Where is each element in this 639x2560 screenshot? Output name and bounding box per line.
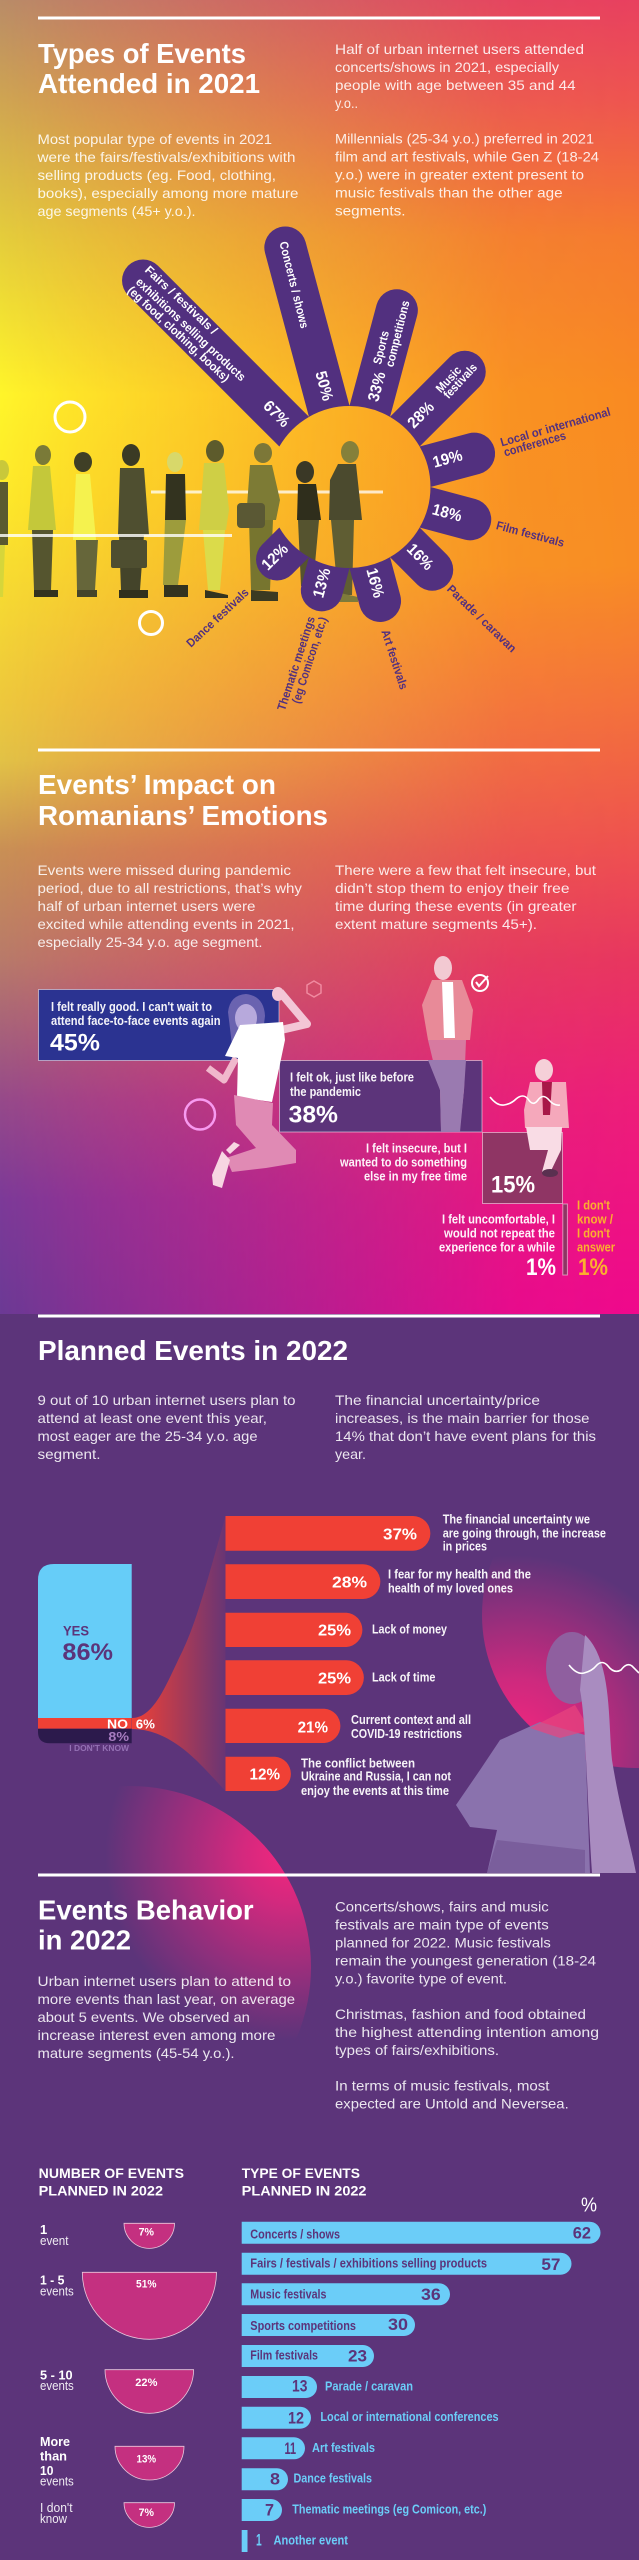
petal: concerts 50%: Concerts / shows	[277, 240, 312, 330]
bar: another: 1	[256, 2531, 262, 2550]
text block: most popular: selling products (eg. Food, clothing,	[38, 167, 276, 183]
decorative pink circle left	[0, 1786, 311, 2148]
callout: don't know 1%: know /	[577, 1211, 613, 1226]
petal: dance 12%	[184, 527, 309, 650]
bar: film: 23	[348, 2347, 367, 2366]
bar: concerts: 62	[573, 2223, 591, 2242]
row: I don't know: 7%	[139, 2507, 154, 2519]
row: 1-5 events: events	[40, 2284, 74, 2299]
text block: concerts and fairs: Concerts/shows, fairs and music	[335, 1899, 549, 1915]
bar 25% money: Lack of money	[372, 1621, 448, 1636]
callout: felt uncomfortable 1%: experience for a while	[439, 1240, 555, 1255]
petal: music 28%	[390, 342, 494, 447]
bar: dance: Dance festivals	[294, 2471, 372, 2486]
petal: sports 33%: competitions	[383, 299, 413, 368]
row: 1 event: event	[40, 2233, 69, 2248]
person 7	[296, 461, 321, 586]
person 6 with bag	[237, 443, 280, 601]
petal: music 28%: 28%	[405, 399, 438, 432]
row: more than 10 events: events	[40, 2474, 74, 2489]
bar chart: type of events	[242, 2195, 600, 2552]
bar: dance	[242, 2468, 372, 2490]
text block: half of urban users: people with age between 35 and 44	[335, 77, 576, 93]
callout: felt really good 45%	[38, 990, 279, 1060]
bar: conferences	[242, 2407, 499, 2429]
text block: concerts and fairs: expected are Untold and Neversea.	[335, 2096, 569, 2112]
callout: felt insecure 15%: 15%	[491, 1172, 535, 1199]
bar: another: Another event	[274, 2532, 349, 2547]
petal: music 28%: festivals	[440, 360, 480, 401]
row: more than 10 events: More	[40, 2434, 70, 2449]
text block: concerts and fairs: y.o.) favorite type of event.	[335, 1971, 507, 1987]
bar 25% time: 25%	[318, 1670, 351, 1687]
bar 37%: are going through, the increase	[443, 1525, 606, 1540]
stacked bar: plan to attend: YES	[63, 1623, 89, 1639]
row: 1-5 events	[40, 2272, 216, 2339]
stacked bar: plan to attend: 6%	[136, 1716, 155, 1731]
bar: concerts: Concerts / shows	[250, 2226, 340, 2241]
petal: art 16%: 16%	[362, 566, 387, 600]
text block: concerts and fairs: remain the youngest generation (18-24	[335, 1953, 596, 1969]
bar: film	[242, 2345, 374, 2367]
text block: most popular: Most popular type of events in 2021	[38, 131, 272, 147]
bar 12%: 12%	[250, 1766, 280, 1783]
petal: dance 12%: 12%	[259, 541, 292, 574]
text block: most popular: books), especially among more mature	[38, 185, 299, 201]
text block: 9 out of 10: segment.	[38, 1446, 100, 1462]
bar: sports: Sports competitions	[250, 2318, 356, 2333]
bar: art: 11	[284, 2439, 296, 2458]
row: 1 event: 7%	[139, 2227, 154, 2239]
petal: conferences 19%: Local or international	[499, 405, 612, 449]
petal: fairs 67%: 67%	[259, 398, 293, 431]
bar: dance: 8	[270, 2469, 280, 2488]
title: Events' Impact	[38, 769, 328, 831]
row: 1-5 events: 1 - 5	[40, 2272, 64, 2287]
text block: financial uncertainty: increases, is the main barrier for those	[335, 1410, 590, 1426]
text block: events were missed: excited while attending events in 2021,	[38, 916, 294, 932]
stacked bar: plan to attend: 86%	[62, 1639, 113, 1666]
callout: felt really good 45%: I felt really good. I can't wait to	[51, 999, 212, 1014]
bar: parade: 13	[292, 2377, 307, 2396]
person 8	[329, 441, 362, 602]
text block: events were missed: especially 25-34 y.o. age segment.	[38, 934, 262, 950]
petal: fairs 67%	[113, 251, 309, 447]
bar: parade: Parade / caravan	[325, 2379, 413, 2394]
text block: a few felt insecure: didn’t stop them to enjoy their free	[335, 880, 570, 896]
petal: film 18%: Film festivals	[495, 518, 566, 550]
bar 25% time	[226, 1660, 435, 1695]
text block: financial uncertainty: year.	[335, 1446, 366, 1462]
stacked bar: plan to attend: I DON'T KNOW	[69, 1744, 129, 1753]
person 4	[163, 452, 188, 597]
bar: music: 36	[421, 2285, 441, 2304]
text block: most popular: age segments (45+ y.o.).	[38, 203, 196, 219]
text block: financial uncertainty	[335, 1392, 596, 1462]
text block: 9 out of 10	[38, 1392, 296, 1462]
petal: fairs 67%: (eg food, clothing, books)	[125, 283, 232, 385]
decorative pink circle right	[482, 1462, 639, 1768]
section: Events' Impact on Romanians' Emotions	[38, 748, 615, 1281]
heading: number of events	[39, 2165, 184, 2198]
gradient background: upper sections	[0, 0, 639, 1314]
petal: art 16%: Art festivals	[378, 628, 411, 691]
photo: seated man	[524, 1059, 569, 1128]
row: I don't know: know	[40, 2511, 68, 2526]
petal: art 16%	[349, 557, 411, 691]
text block: urban internet users	[38, 1973, 295, 2061]
row: 5-10 events: 5 - 10	[40, 2367, 73, 2382]
bar: art	[242, 2437, 375, 2459]
percent sign: %	[581, 2195, 597, 2217]
title: Planned Events: Planned Events in 2022	[38, 1335, 348, 1366]
heading: type of events: PLANNED IN 2022	[242, 2182, 367, 2198]
callout: don't know 1%	[577, 1197, 615, 1281]
callout: felt ok 38%: 38%	[289, 1102, 338, 1129]
photo: standing man	[422, 956, 473, 1132]
text block: 9 out of 10: 9 out of 10 urban internet users plan to	[38, 1392, 296, 1408]
title: Events Behavior	[38, 1894, 254, 1955]
bar: sports	[242, 2314, 415, 2336]
petal: thematic 13%: (eg Comicon, etc.)	[289, 615, 330, 705]
row: 1 event: 1	[40, 2222, 47, 2237]
text block: half of urban users: film and art festivals, while Gen Z (18-24	[335, 148, 599, 164]
text block: concerts and fairs: festivals are main type of events	[335, 1917, 549, 1933]
text block: events were missed	[38, 862, 302, 950]
radial chart: event types attended	[113, 222, 612, 712]
person 0	[0, 460, 9, 597]
bar: art: Art festivals	[312, 2440, 375, 2455]
text block: half of urban users: music festivals than the other age	[335, 184, 563, 200]
bar 37%: The financial uncertainty we	[443, 1511, 590, 1526]
heading: number of events: NUMBER OF EVENTS	[39, 2165, 184, 2181]
text block: urban internet users: about 5 events. We observed an	[38, 2009, 250, 2025]
title: Events' Impact: Events’ Impact on	[38, 769, 276, 800]
bar 25% time: Lack of time	[372, 1670, 435, 1685]
text block: urban internet users: increase interest even among more	[38, 2027, 276, 2043]
bar: parade	[242, 2376, 413, 2398]
bar 21%: Current context and all	[351, 1712, 471, 1727]
bar 37%: 37%	[383, 1526, 417, 1543]
bar: conferences: 12	[288, 2408, 304, 2427]
bar: another	[242, 2530, 349, 2552]
text block: half of urban users: concerts/shows in 2021, especially	[335, 59, 559, 75]
text block: events were missed: Events were missed during pandemic	[38, 862, 291, 878]
photo: jumping woman	[208, 987, 307, 1188]
illustration: queue of people	[0, 440, 362, 602]
petal: fairs 67%: Fairs / festivals /	[142, 263, 221, 338]
bar: fairs: Fairs / festivals / exhibitions selling products	[250, 2255, 487, 2270]
text block: 9 out of 10: attend at least one event this year,	[38, 1410, 267, 1426]
text block: concerts and fairs: planned for 2022. Music festivals	[335, 1935, 551, 1951]
title: Events Behavior: Events Behavior	[38, 1894, 254, 1925]
callout: felt ok 38%: I felt ok, just like before	[290, 1070, 414, 1085]
bar 12%	[226, 1755, 452, 1798]
row: more than 10 events	[40, 2434, 184, 2489]
text block: a few felt insecure: extent mature segments 45+).	[335, 916, 537, 932]
title: Types of Events: Types of Events	[38, 38, 246, 69]
petal: sports 33%	[349, 285, 423, 417]
bar 28%: I fear for my health and the	[388, 1567, 531, 1582]
stacked bar: plan to attend	[38, 1564, 155, 1753]
person 2	[73, 452, 98, 597]
petal: concerts 50%	[260, 222, 350, 417]
text block: half of urban users	[335, 41, 599, 218]
text block: financial uncertainty: 14% that don’t have event plans for this	[335, 1428, 596, 1444]
icon: hexagon	[307, 981, 321, 997]
row: 1 event	[40, 2222, 174, 2248]
half-circle chart: number of events	[40, 2222, 216, 2527]
row: 5-10 events: 22%	[135, 2377, 158, 2389]
text block: most popular: were the fairs/festivals/exhibitions with	[36, 149, 295, 165]
petal: conferences 19%: 19%	[431, 447, 464, 472]
callout: felt ok 38%: the pandemic	[290, 1084, 361, 1099]
bar: fairs: 57	[541, 2255, 560, 2274]
section: Planned Events in 2022	[38, 1314, 639, 1873]
bar 21%	[226, 1709, 471, 1743]
petal: sports 33%: Sports	[370, 329, 392, 366]
bar: thematic: 7	[265, 2501, 274, 2520]
decorative white line behind people	[151, 490, 383, 494]
stacked bar: plan to attend: NO	[107, 1716, 128, 1731]
petal: conferences 19%: conferences	[502, 428, 568, 459]
text block: concerts and fairs: the highest attending intention among	[335, 2024, 599, 2040]
petal: music 28%: Music	[433, 363, 464, 395]
row: more than 10 events: 10	[40, 2463, 53, 2478]
bar: thematic: Thematic meetings (eg Comicon, etc.)	[292, 2501, 486, 2516]
row: I don't know	[40, 2500, 174, 2527]
wave decoration	[490, 1096, 560, 1105]
row: 5-10 events	[40, 2367, 194, 2413]
petal: parade 16%: 16%	[403, 541, 436, 574]
callout: felt really good 45%: 45%	[50, 1030, 100, 1057]
text block: events were missed: period, due to all restrictions, that’s why	[38, 880, 302, 896]
person 5	[199, 440, 229, 598]
text block: half of urban users: y.o..	[335, 95, 358, 111]
row: I don't know: I don't	[40, 2500, 73, 2515]
callout: felt really good 45%: attend face-to-face events again	[51, 1013, 221, 1028]
person 1	[28, 445, 58, 597]
row: more than 10 events: than	[40, 2449, 67, 2464]
callout: felt insecure 15%	[339, 1127, 562, 1204]
bar chart: barriers	[226, 1511, 606, 1798]
bar 25% money	[226, 1613, 448, 1647]
heading: type of events: TYPE OF EVENTS	[242, 2165, 360, 2181]
bar: music: Music festivals	[250, 2286, 326, 2301]
row: more than 10 events: 13%	[136, 2454, 156, 2466]
petal: conferences 19%	[420, 405, 612, 487]
callout: don't know 1%: I don't	[577, 1197, 611, 1212]
title: Events' Impact: Romanians’ Emotions	[38, 800, 328, 831]
decorative white line in front of people	[0, 534, 232, 537]
petal: concerts 50%: 50%	[311, 369, 336, 403]
callout: felt uncomfortable 1%	[439, 1204, 567, 1281]
text block: concerts and fairs: In terms of music festivals, most	[335, 2078, 550, 2094]
text block: concerts and fairs: types of fairs/exhibitions.	[335, 2042, 499, 2058]
bar 12%: The conflict between	[301, 1755, 415, 1770]
icon: pink ring	[185, 1100, 215, 1130]
bar 28%: health of my loved ones	[388, 1581, 513, 1596]
petal: parade 16%	[390, 527, 519, 655]
petal: parade 16%: Parade / caravan	[444, 582, 519, 655]
bar 37%	[226, 1511, 606, 1554]
bar 28%	[226, 1564, 531, 1599]
bar: conferences: Local or international conferences	[320, 2409, 499, 2424]
callout: felt uncomfortable 1%: I felt uncomfortable, I	[442, 1211, 555, 1226]
text block: half of urban users: Millennials (25-34 y.o.) preferred in 2021	[335, 130, 594, 146]
title: Types of Events: Attended in 2021	[38, 68, 260, 99]
row: 5-10 events: events	[40, 2378, 74, 2393]
callout: felt uncomfortable 1%: 1%	[526, 1254, 556, 1281]
petal: fairs 67%: exhibitions selling products	[133, 275, 249, 384]
text block: half of urban users: segments.	[335, 202, 406, 218]
title: Types of Events	[38, 38, 260, 99]
text block: urban internet users: mature segments (45-54 y.o.).	[38, 2045, 234, 2061]
bar: sports: 30	[388, 2315, 408, 2334]
callout: felt insecure 15%: else in my free time	[364, 1169, 467, 1184]
callout: felt ok 38%	[280, 1060, 482, 1132]
petal: film 18%	[420, 487, 566, 550]
bar: concerts	[242, 2222, 600, 2244]
petal: film 18%: 18%	[430, 501, 464, 526]
heading: type of events	[242, 2165, 367, 2198]
petal: dance 12%: Dance festivals	[184, 585, 252, 650]
heading: number of events: PLANNED IN 2022	[39, 2182, 163, 2198]
bar: music	[242, 2283, 450, 2305]
section: Types of Events Attended in 2021	[0, 16, 612, 712]
text block: half of urban users: y.o.) were in greater extent present to	[335, 166, 584, 182]
bar 25% money: 25%	[318, 1623, 351, 1640]
petal: thematic 13%: Thematic meetings	[274, 614, 318, 712]
text block: half of urban users: Half of urban internet users attended	[335, 41, 584, 57]
text block: a few felt insecure: There were a few that felt insecure, but	[335, 862, 596, 878]
callout: don't know 1%: I don't	[577, 1225, 611, 1240]
bar: film: Film festivals	[250, 2347, 318, 2362]
bar 21%: 21%	[298, 1719, 328, 1736]
person 3 with briefcase	[111, 444, 149, 598]
funnel connector	[132, 1516, 226, 1791]
text block: 9 out of 10: most eager are the 25-34 y.o. age	[38, 1428, 258, 1444]
bar 37%: in prices	[443, 1539, 487, 1554]
ring icon bottom	[140, 612, 162, 634]
section: Events Behavior in 2022	[38, 1874, 600, 2552]
bar: thematic	[242, 2499, 486, 2521]
text block: a few felt insecure: time during these events (in greater	[335, 898, 577, 914]
bar 12%: Ukraine and Russia, I can not	[301, 1769, 452, 1784]
text block: concerts and fairs	[335, 1899, 599, 2112]
text block: a few felt insecure	[335, 862, 596, 932]
callout: felt insecure 15%: I felt insecure, but I	[366, 1141, 467, 1156]
title: Events Behavior: in 2022	[38, 1924, 131, 1955]
petal: thematic 13%: 13%	[310, 566, 335, 600]
text block: urban internet users: Urban internet users plan to attend to	[38, 1973, 291, 1989]
bar: fairs	[242, 2253, 571, 2275]
text block: concerts and fairs: Christmas, fashion and food obtained	[335, 2006, 586, 2022]
callout: felt uncomfortable 1%: would not repeat the	[443, 1225, 555, 1240]
row: 1-5 events: 51%	[136, 2279, 157, 2291]
photo: woman seen from behind	[456, 1632, 636, 1873]
text block: most popular	[36, 131, 299, 219]
bar 12%: enjoy the events at this time	[301, 1783, 449, 1798]
text block: financial uncertainty: The financial uncertainty/price	[335, 1392, 540, 1408]
stacked bar: plan to attend: 8%	[108, 1729, 129, 1744]
callout: felt insecure 15%: wanted to do something	[339, 1155, 467, 1170]
icon: check badge	[472, 975, 488, 991]
callout: don't know 1%: 1%	[578, 1254, 608, 1281]
wave decoration	[569, 1662, 639, 1673]
bar 28%: 28%	[332, 1575, 367, 1592]
text block: urban internet users: more events than last year, on average	[38, 1991, 295, 2007]
petal: thematic 13%	[274, 557, 350, 712]
callout: don't know 1%: answer	[577, 1240, 615, 1255]
petal: sports 33%: 33%	[365, 370, 390, 404]
ring icon top	[55, 402, 85, 432]
text block: events were missed: half of urban internet users were	[38, 898, 256, 914]
bar 21%: COVID-19 restrictions	[351, 1726, 462, 1741]
